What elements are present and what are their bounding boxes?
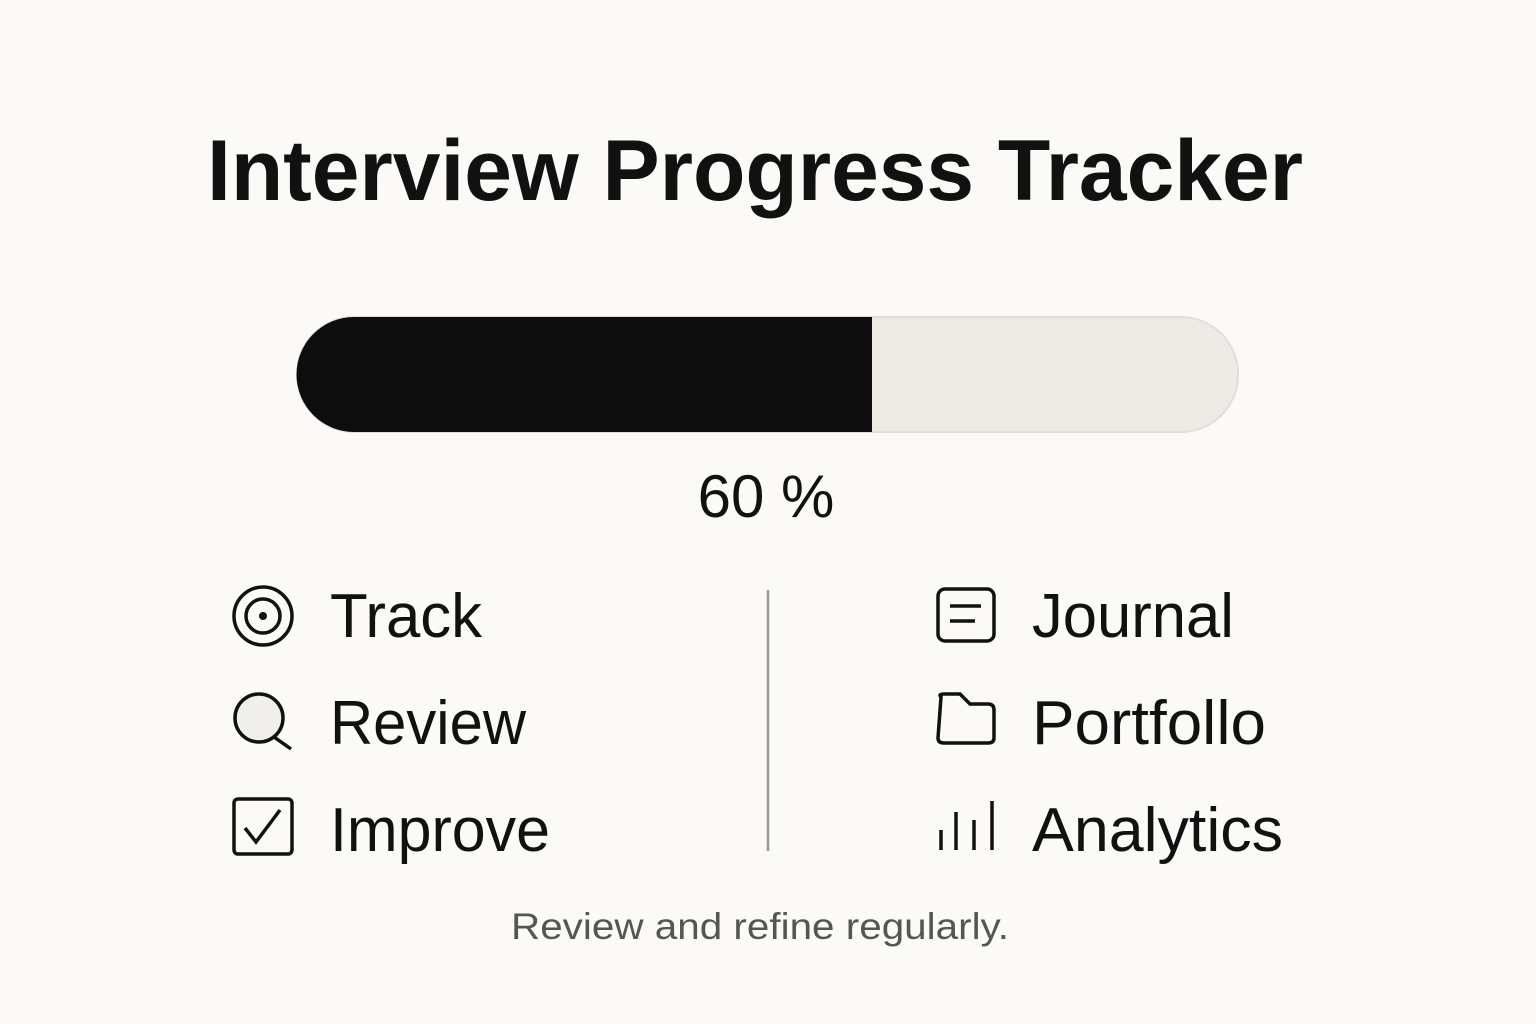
divider [767, 590, 769, 851]
label: Portfollo: Portfollo [1032, 689, 1266, 758]
label: Track: Track [330, 582, 483, 651]
title: Interview Progress Tracker [207, 123, 1303, 219]
footer: Review and refine regularly. [511, 906, 1009, 947]
icon: folder [938, 694, 994, 743]
label: Journal: Journal [1032, 582, 1234, 651]
icon: target [234, 587, 292, 645]
icon: journal [938, 589, 994, 641]
right list [938, 582, 1283, 865]
label: Analytics: Analytics [1032, 796, 1283, 865]
label: Review: Review [330, 689, 526, 758]
percentage label: 60 % [698, 463, 834, 530]
icon: magnifier [235, 694, 291, 749]
left list [234, 582, 550, 865]
icon: analytics bars [941, 801, 992, 850]
label: Improve: Improve [330, 796, 550, 865]
icon: checkbox [234, 799, 292, 854]
progress bar [297, 317, 1238, 432]
